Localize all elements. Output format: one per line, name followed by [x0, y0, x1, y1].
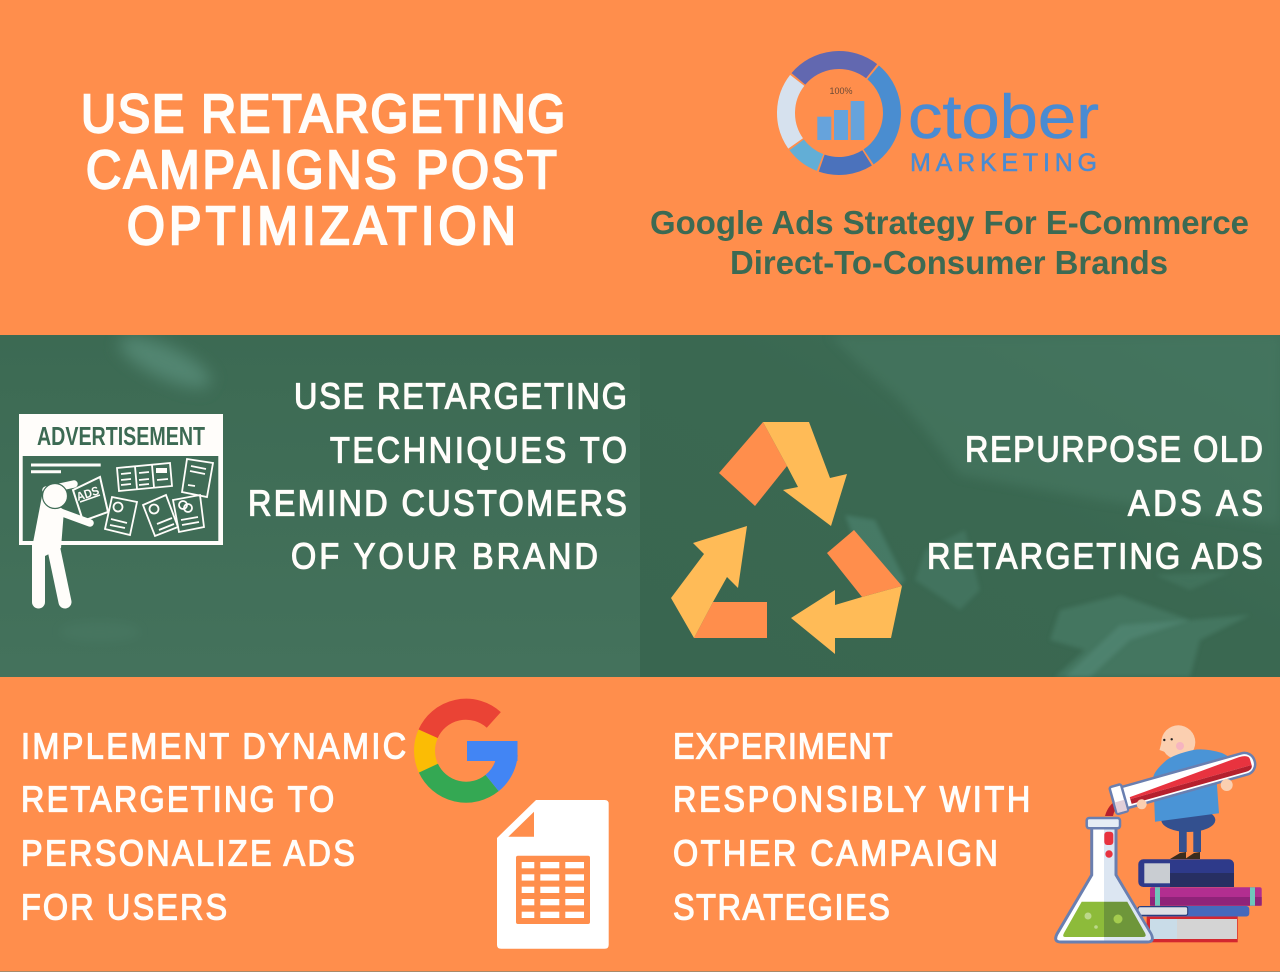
panel: left green background: [0, 326, 640, 677]
panel text: dynamic retargeting: PERSONALIZE ADS: [21, 834, 355, 874]
logo percentage: 100%: [829, 86, 853, 96]
panel text: repurpose old ads: REPURPOSE OLD: [965, 430, 1263, 470]
panel text: experiment responsibly: OTHER CAMPAIGN: [673, 834, 998, 874]
panel text: retargeting techniques: REMIND CUSTOMERS: [248, 484, 627, 524]
icon: recycle arrows: [671, 422, 902, 654]
panel text: dynamic retargeting: FOR USERS: [21, 888, 227, 928]
panel text: dynamic retargeting: [21, 727, 406, 928]
flask: [1056, 818, 1152, 942]
ADS label: ADS: [75, 483, 101, 504]
title: OPTIMIZATION: [127, 195, 516, 256]
panel text: dynamic retargeting: IMPLEMENT DYNAMIC: [21, 727, 406, 767]
panel text: repurpose old ads: ADS AS: [1128, 484, 1263, 524]
icon: advertisement board: [19, 414, 223, 602]
board heading: ADVERTISEMENT: [37, 421, 205, 451]
subtitle: Google Ads Strategy For E-Commerce: [650, 204, 1249, 241]
panel text: repurpose old ads: [927, 430, 1263, 577]
title: [81, 83, 565, 256]
icon: spreadsheet document: [497, 800, 609, 949]
icon: google G: [425, 709, 518, 792]
pouring liquid: [1105, 800, 1119, 816]
logo: October Marketing: [786, 60, 1099, 177]
books: [1138, 859, 1262, 942]
title: USE RETARGETING: [81, 83, 565, 144]
logo donut chart: [786, 60, 892, 166]
panel text: repurpose old ads: RETARGETING ADS: [927, 537, 1263, 577]
panel text: dynamic retargeting: RETARGETING TO: [21, 780, 334, 820]
logo wordmark: ctober: [908, 83, 1099, 152]
presenter figure: [32, 484, 90, 602]
logo bars: [817, 101, 864, 140]
board: [19, 414, 223, 545]
panel text: retargeting techniques: [248, 377, 627, 577]
test tube: [1109, 748, 1258, 814]
panel text: experiment responsibly: EXPERIMENT: [673, 727, 893, 767]
panel: right green background: [640, 335, 1280, 677]
panel text: retargeting techniques: OF YOUR BRAND: [291, 537, 598, 577]
subtitle: Direct-To-Consumer Brands: [730, 244, 1168, 281]
scientist: [1153, 725, 1237, 859]
panel text: experiment responsibly: [673, 727, 1030, 928]
icon: scientist with flask and books: [1056, 725, 1262, 942]
panel text: experiment responsibly: RESPONSIBLY WITH: [673, 780, 1030, 820]
panel text: retargeting techniques: TECHNIQUES TO: [330, 431, 627, 471]
panel text: retargeting techniques: USE RETARGETING: [294, 377, 627, 417]
hands: [1137, 799, 1147, 809]
panel text: experiment responsibly: STRATEGIES: [673, 888, 890, 928]
board lines and pinned documents: [31, 459, 213, 536]
brochure highlight: [156, 468, 167, 473]
subtitle: [650, 204, 1249, 281]
logo: October Marketing: MARKETING: [910, 149, 1097, 177]
title: CAMPAIGNS POST: [86, 139, 557, 200]
